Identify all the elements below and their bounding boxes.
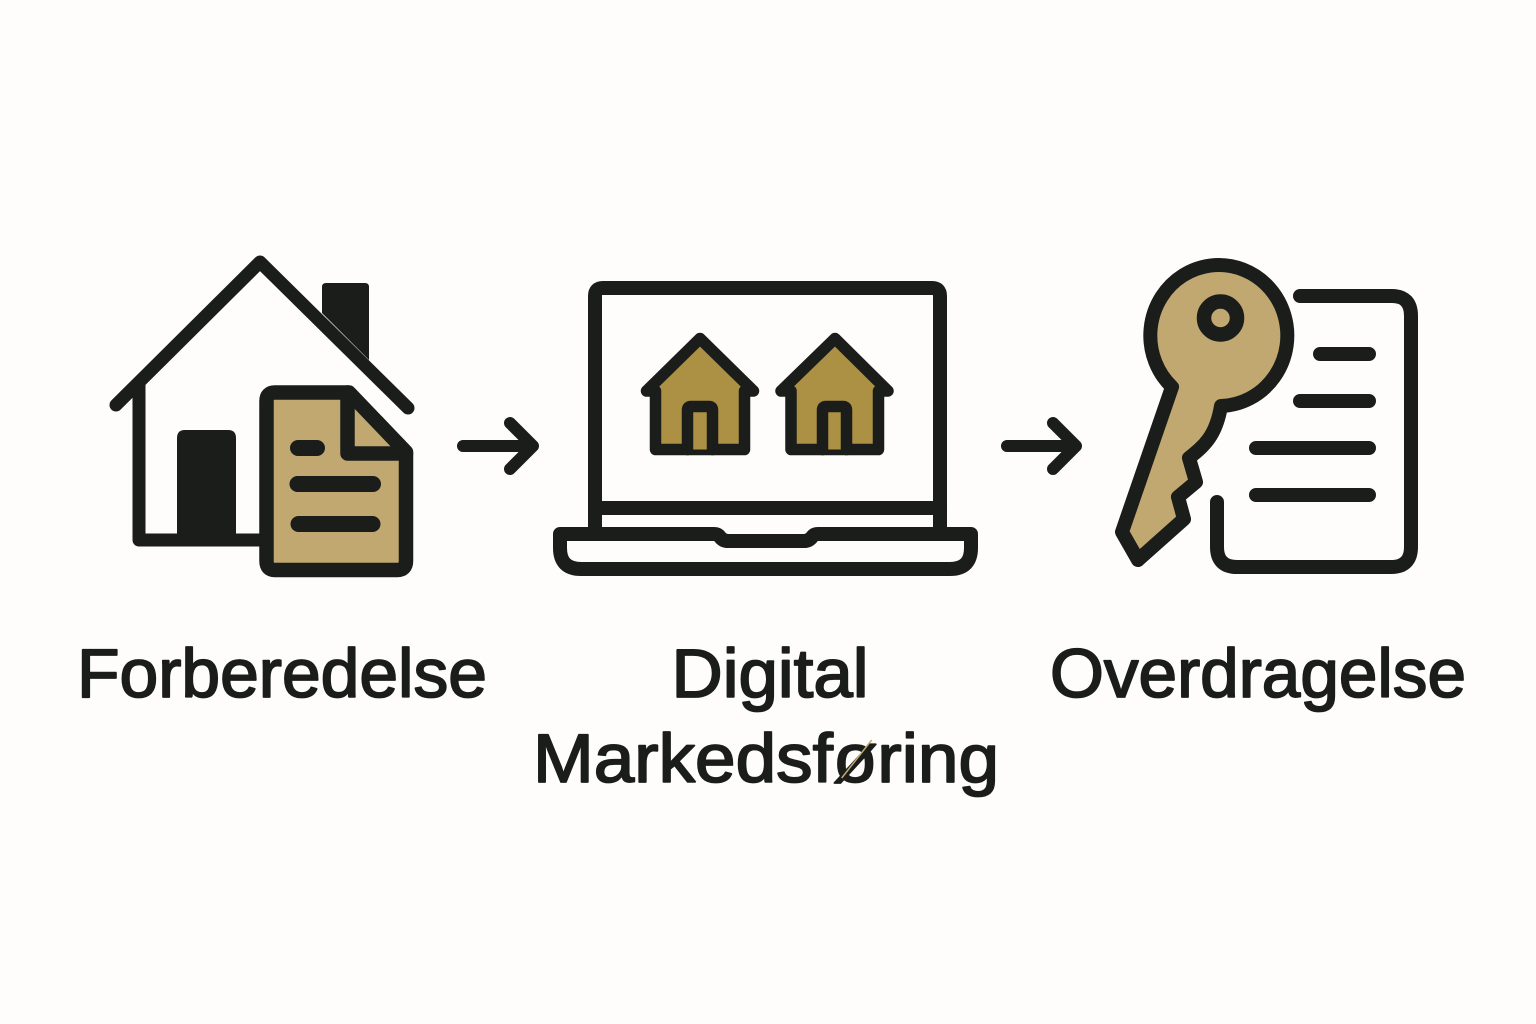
- house door: [177, 430, 236, 540]
- label: Overdragelse: Overdragelse: [1050, 635, 1466, 712]
- label: Digital Markedsføring: Digital: [672, 635, 868, 712]
- house icon right: [781, 338, 888, 450]
- document sheet: [266, 392, 406, 570]
- laptop base: [560, 534, 971, 569]
- icon: house with document: [116, 262, 408, 570]
- laptop screen: [595, 288, 940, 530]
- house outline: [116, 262, 408, 540]
- house icon left: [646, 338, 754, 450]
- contract sheet: [1217, 296, 1411, 567]
- icon: laptop with two houses: [560, 288, 971, 569]
- label: Digital Markedsføring: [533, 635, 999, 797]
- label: Digital Markedsføring: Markedsføring: [533, 720, 999, 797]
- key: [1122, 265, 1287, 560]
- arrow: step one to step two: [463, 423, 533, 469]
- house chimney: [322, 283, 369, 360]
- label: Forberedelse: Forberedelse: [77, 635, 487, 712]
- arrow: step two to step three: [1007, 423, 1076, 469]
- icon: key with contract: [1122, 265, 1411, 567]
